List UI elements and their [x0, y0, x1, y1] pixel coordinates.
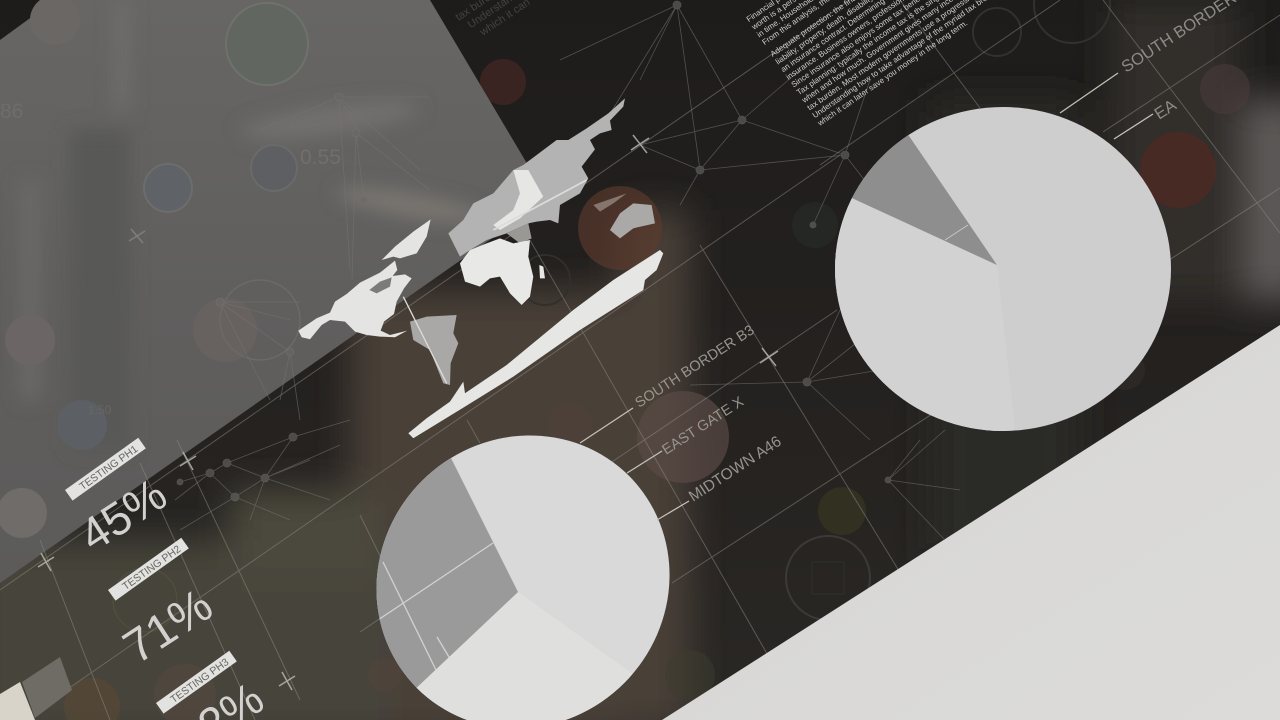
pie chart: small [376, 436, 670, 720]
line across South America [403, 297, 447, 383]
label: South Border B3: SOUTH BORDER B3 [632, 322, 757, 411]
continent: Africa [460, 238, 545, 305]
panel bokeh rings and ghost figures [0, 0, 341, 538]
continent: Eurasia [448, 98, 627, 257]
stat: testing phase 2: TESTING PH2 [120, 543, 183, 593]
white diagonal band [662, 325, 1280, 720]
continent: North America and Greenland [298, 219, 431, 339]
stat: testing phase 2 [108, 538, 221, 673]
paragraph: financial text [744, 0, 1004, 128]
label: EA large: EA [1151, 96, 1180, 123]
stat: testing phase 1: TESTING PH1 [77, 443, 140, 493]
panel haze and streaks [24, 102, 471, 390]
panel bokeh rings and ghost figures: 1.50 [88, 403, 112, 417]
stat: testing phase 3 [156, 651, 273, 720]
continent: South America [410, 315, 458, 385]
pie chart: large [835, 107, 1171, 431]
label: Midtown A46: MIDTOWN A46 [686, 433, 785, 505]
panel bokeh rings and ghost figures: 86 [0, 100, 23, 123]
crosshair markers [38, 135, 778, 690]
grey translucent panel [0, 0, 548, 583]
slice: dark wedge [852, 135, 997, 265]
leader lines [580, 73, 1153, 520]
world map [298, 98, 663, 438]
continent: Antarctica [408, 250, 663, 438]
ghost paragraph at top [453, 0, 539, 45]
slice: lower [416, 674, 632, 720]
slice: lower left [835, 198, 1014, 431]
corner blocks bottom left [0, 657, 72, 720]
network constellation [175, 1, 960, 540]
stat: testing phase 1: 45% [70, 468, 176, 561]
paragraph: financial text: which it can later save you money in the long term. [815, 18, 969, 128]
stat: testing phase 2: 71% [114, 578, 221, 673]
panel bokeh rings and ghost figures: 0.55 [300, 146, 341, 169]
label: East Gate X: EAST GATE X [659, 394, 747, 458]
slice: dark wedge [376, 458, 518, 688]
continent: Australia [610, 203, 655, 238]
lines over the wedge [378, 543, 493, 670]
stat: testing phase 3: TESTING PH3 [168, 656, 231, 706]
